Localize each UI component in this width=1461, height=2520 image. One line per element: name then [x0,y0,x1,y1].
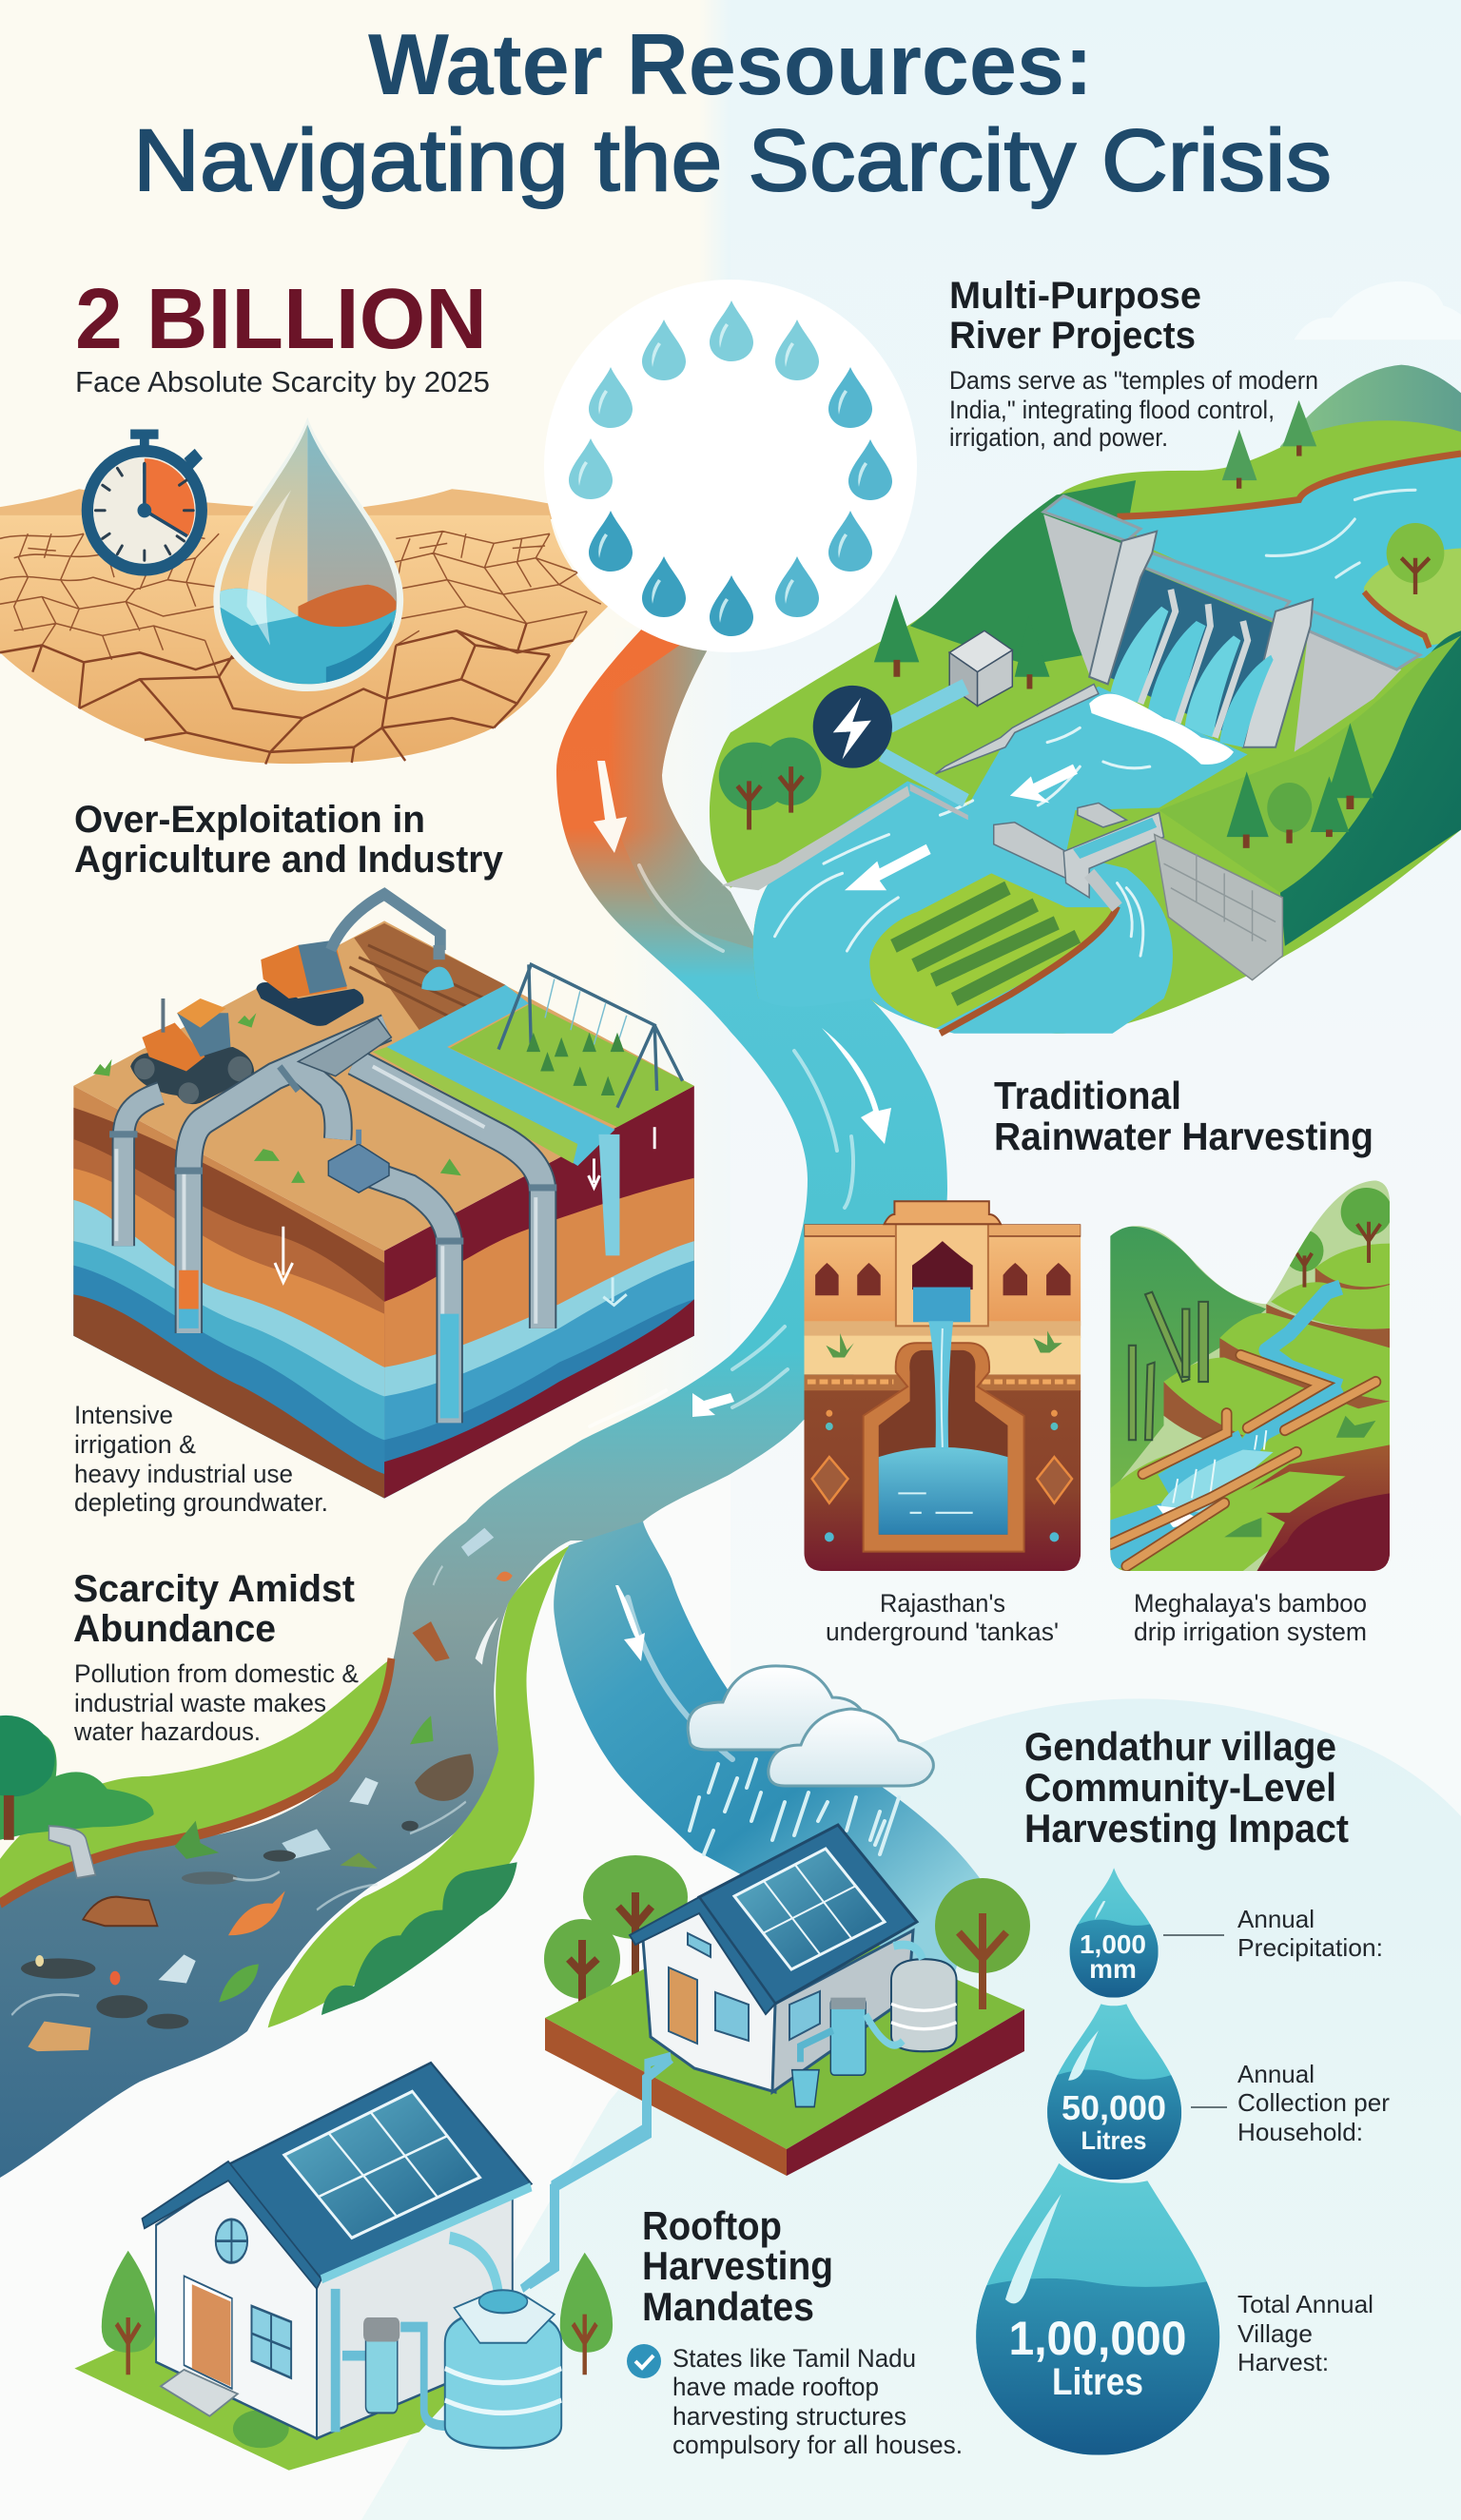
door and windows [669,1968,697,2044]
tree behind house [544,1855,688,2014]
rain lines [690,1759,899,1854]
stat drop: total village harvest: 1,00,000 [1008,2312,1187,2365]
text: dams description: Dams serve as "temples of modern [949,366,1318,395]
trees around the dam [719,400,1373,848]
captions: traditional methods [826,1589,1367,1646]
crop island [869,873,1118,1034]
heading: multi-purpose river projects: Multi-Purpose [949,275,1201,317]
filter [363,2317,399,2413]
riverside trees [0,1716,154,1840]
filter and bucket [792,1998,903,2107]
trees [102,2251,613,2375]
stat drop: annual precipitation: 1,000 [1080,1929,1146,1959]
label: collection per household: Household: [1237,2118,1363,2146]
door [184,2276,232,2389]
heading: traditional rainwater harvesting [994,1074,1373,1158]
text: dams description: India," integrating flood control, [949,396,1275,424]
top face [73,921,694,1250]
panel: isometric groundwater block [73,894,694,1499]
title [133,17,1332,209]
stat: 2 billion: 2 BILLION [75,272,487,367]
panel: upper house with rainwater tank [544,1825,1030,2176]
label: collection per household: Collection per [1237,2088,1390,2117]
arrow: cyan stretch [822,1028,891,1144]
desert hills [0,489,555,519]
hillside behind dam [910,480,1136,665]
text: rooftop mandate description: compulsory for all houses. [672,2431,963,2459]
text: groundwater description: Intensive [74,1401,173,1429]
gate weir [994,803,1282,980]
downstream river [753,687,1248,1034]
cracked earth [0,515,608,764]
text: scarcity amidst abundance: Abundance [73,1608,276,1650]
right face soil layers [384,1086,694,1499]
falling water [928,1321,953,1449]
label: total annual village harvest: Total Annual [1237,2290,1373,2318]
grass [1224,1416,1375,1537]
distant hill [1280,365,1461,471]
house walls [156,2178,317,2438]
bamboo stalks [1129,1292,1208,1440]
icon: ring of water drops [569,300,892,636]
gutter and pipes [321,2056,671,2433]
green platform [545,1902,1024,2149]
groundwater pipes [109,1028,556,1423]
solar panel [734,1849,885,1969]
text: groundwater description [74,1401,328,1517]
panel: lower house with solar roof and tank [74,2056,671,2471]
power house [949,630,1012,706]
arches [815,1241,1071,1295]
earth cracks [0,532,601,677]
text: rooftop mandate description: harvesting structures [672,2402,906,2431]
green strip [373,1047,577,1163]
dam body [1043,495,1420,752]
steps [161,2370,238,2416]
irrigation stream [387,985,615,1166]
label: annual precipitation: Precipitation: [1237,1933,1383,1962]
captions: traditional methods: Rajasthan's [880,1589,1005,1618]
arrow: blue branch [615,1585,645,1661]
label: annual precipitation: Annual [1237,1905,1315,1933]
title: Water Resources: [368,17,1093,113]
palace tower [896,1224,988,1326]
river: orange to cyan to polluted grey [0,609,980,2178]
heading: over-exploitation: Agriculture and Industry [74,839,504,881]
heading: Gendathur village impact: Gendathur village [1024,1724,1336,1769]
solar panels [284,2091,479,2238]
captions: traditional methods: underground 'tankas' [826,1618,1059,1646]
text: scarcity amidst abundance: industrial waste makes [74,1689,326,1717]
left face soil layers [73,1086,384,1499]
text: scarcity amidst abundance: water hazardous. [73,1717,261,1746]
stat drop: collection per household [1042,2002,1390,2183]
stat drop: collection per household: 50,000 [1062,2088,1166,2127]
roof [699,1825,917,2004]
sprinkler frame [498,964,683,1108]
pipe T-junction [298,1018,391,1076]
label: total annual village harvest: Harvest: [1237,2348,1329,2376]
left river bank [0,1658,391,1904]
stat: 2 billion: Face Absolute Scarcity by 2025 [75,365,490,398]
storage tank [891,1945,957,2051]
heading: multi-purpose river projects: River Projects [949,315,1196,357]
dark cliff [1280,630,1461,946]
house walls [643,1907,775,2092]
heading: rooftop harvesting mandates [642,2203,833,2329]
stat drop: annual precipitation [1066,1867,1383,2004]
label: collection per household: Annual [1237,2060,1315,2088]
label: total annual village harvest: Village [1237,2319,1313,2348]
icon: rain clouds [688,1666,933,1786]
icon: tree on island [1387,523,1444,594]
heading: Gendathur village impact: Harvesting Impact [1024,1806,1349,1851]
text: dams description: irrigation, and power. [949,423,1168,452]
waterfall into aquifer [598,1134,619,1255]
desert plants [826,1330,1062,1358]
text: scarcity amidst abundance: Pollution from domestic & [74,1659,359,1688]
text: dams description [949,366,1318,452]
crop rows [526,1033,624,1095]
text: groundwater description: heavy industrial use [74,1460,293,1488]
title: Navigating the Scarcity Crisis [133,112,1332,209]
stored water [879,1447,1007,1535]
text: rooftop mandate description: States like Tamil Nadu [672,2344,916,2373]
heading: multi-purpose river projects [949,275,1318,452]
icon: power [813,686,892,768]
icon: check mark [627,2344,661,2378]
land [710,420,1461,1034]
debris [21,1528,513,2051]
inlet water [913,1288,970,1322]
hilltop trees [1283,1188,1393,1288]
windows [251,2306,291,2378]
icon: large droplet [213,417,403,691]
icon: stopwatch [82,430,207,576]
upstream reservoir [1118,454,1461,660]
penstock pipes [882,687,968,820]
terraces [1315,1244,1390,1288]
tractor [130,998,254,1104]
lawn [74,2330,466,2471]
panel: polluted river banks and debris [0,1528,570,2051]
text: groundwater description: irrigation & [74,1430,196,1459]
grass tufts [93,1013,461,1183]
heading: over-exploitation: Over-Exploitation in [74,799,425,841]
label: annual precipitation [1163,1905,1383,1962]
connecting pipe between houses [528,2059,671,2285]
flow arrows on dam river [845,765,1078,890]
heading: Gendathur village impact: Community-Level [1024,1765,1336,1810]
excavator [256,894,455,1026]
right river bank [268,1545,570,2027]
valve box [328,1130,389,1192]
heading: rooftop harvesting mandates: Harvesting [642,2243,833,2288]
panel: multi-purpose river project scene [710,281,1461,1034]
heading: Gendathur village impact [1024,1724,1349,1851]
green crop field [450,1003,694,1127]
text: scarcity amidst abundance: Scarcity Amidst [73,1568,355,1610]
white circle with drops [544,280,917,652]
label: total annual village harvest [1237,2290,1373,2376]
left bank wall [721,786,910,890]
stat drop: total village harvest: Litres [1052,2361,1143,2403]
shrubs [321,1862,517,2015]
panel: dry land with stopwatch and droplet [0,417,608,765]
captions: traditional methods: Meghalaya's bamboo [1134,1589,1367,1618]
depletion arrows [275,1127,654,1305]
text: rooftop mandate description [672,2344,963,2459]
tree beside house [935,1878,1030,2009]
text: rooftop mandate description: have made rooftop [672,2373,879,2401]
furrowed field [349,923,505,1030]
text: groundwater description: depleting groundwater. [74,1488,328,1517]
heading: over-exploitation [74,799,504,881]
text: scarcity amidst abundance [73,1568,359,1746]
stat drop: annual precipitation: mm [1089,1954,1137,1984]
label: collection per household [1191,2060,1390,2146]
foaming water [1089,694,1234,765]
water ripples [11,1566,466,2015]
rainwater tank [445,2290,561,2448]
captions: traditional methods: drip irrigation system [1134,1618,1367,1646]
outfall pipe [49,1826,95,1878]
river island with tree [1364,549,1461,646]
tank chamber [864,1343,1024,1552]
panel: Meghalaya bamboo drip illustration [1110,1180,1393,1571]
roof [228,2063,531,2279]
arrow: orange stretch [594,761,627,853]
cloud [1295,281,1461,339]
stat drop: collection per household: Litres [1081,2126,1147,2155]
mountain stream [1168,1288,1341,1493]
heading: rooftop harvesting mandates: Mandates [642,2284,814,2329]
heading: rooftop harvesting mandates: Rooftop [642,2203,782,2248]
stat drop: total village harvest [973,2160,1373,2457]
bamboo pipes [1110,1355,1375,1566]
panel: Rajasthan tanka illustration [804,1201,1081,1571]
heading: traditional rainwater harvesting: Rainwater Harvesting [994,1115,1373,1158]
river flow streaks [590,865,853,1759]
ornaments [812,1410,1072,1541]
heading: traditional rainwater harvesting: Traditional [994,1074,1181,1117]
arrow: middle stretch [692,1393,734,1417]
